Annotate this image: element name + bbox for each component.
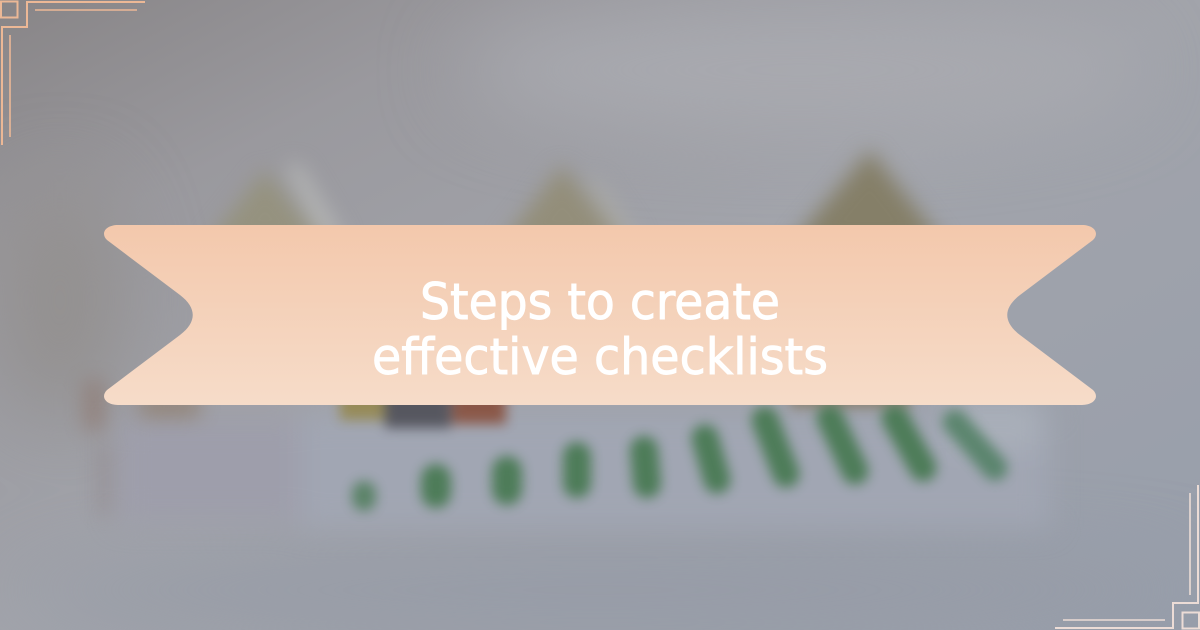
blurred houses [205, 150, 945, 245]
corner ornament: top left [1, 2, 145, 145]
blurred green bars [364, 418, 995, 499]
corner ornament: bottom right [1055, 485, 1199, 628]
paper sheet [118, 400, 1050, 527]
title: effective checklists [372, 328, 828, 386]
ribbon banner [104, 225, 1096, 405]
title [372, 273, 828, 386]
blurred coloured pieces [340, 390, 910, 428]
title: Steps to create [420, 273, 780, 331]
